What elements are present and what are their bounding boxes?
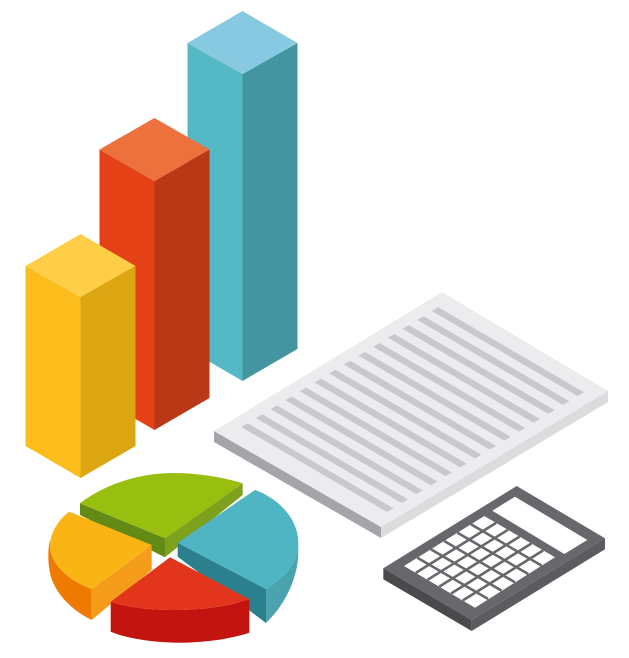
calculator <box>383 486 605 631</box>
calculator keypad <box>404 516 555 608</box>
document text lines <box>241 307 584 512</box>
bar: short yellow <box>26 234 136 478</box>
pie slice: green <box>80 473 243 557</box>
bar: middle red <box>100 118 210 430</box>
calculator display <box>492 497 587 554</box>
document: sheet with text lines <box>214 292 608 538</box>
bar chart: three isometric bars <box>26 11 298 478</box>
pie slice: blue <box>178 490 298 623</box>
pie chart: four exploded slices <box>48 473 298 643</box>
bar: tall blue <box>188 11 298 381</box>
pie slice: yellow <box>48 512 152 620</box>
pie slice: red <box>111 557 249 643</box>
